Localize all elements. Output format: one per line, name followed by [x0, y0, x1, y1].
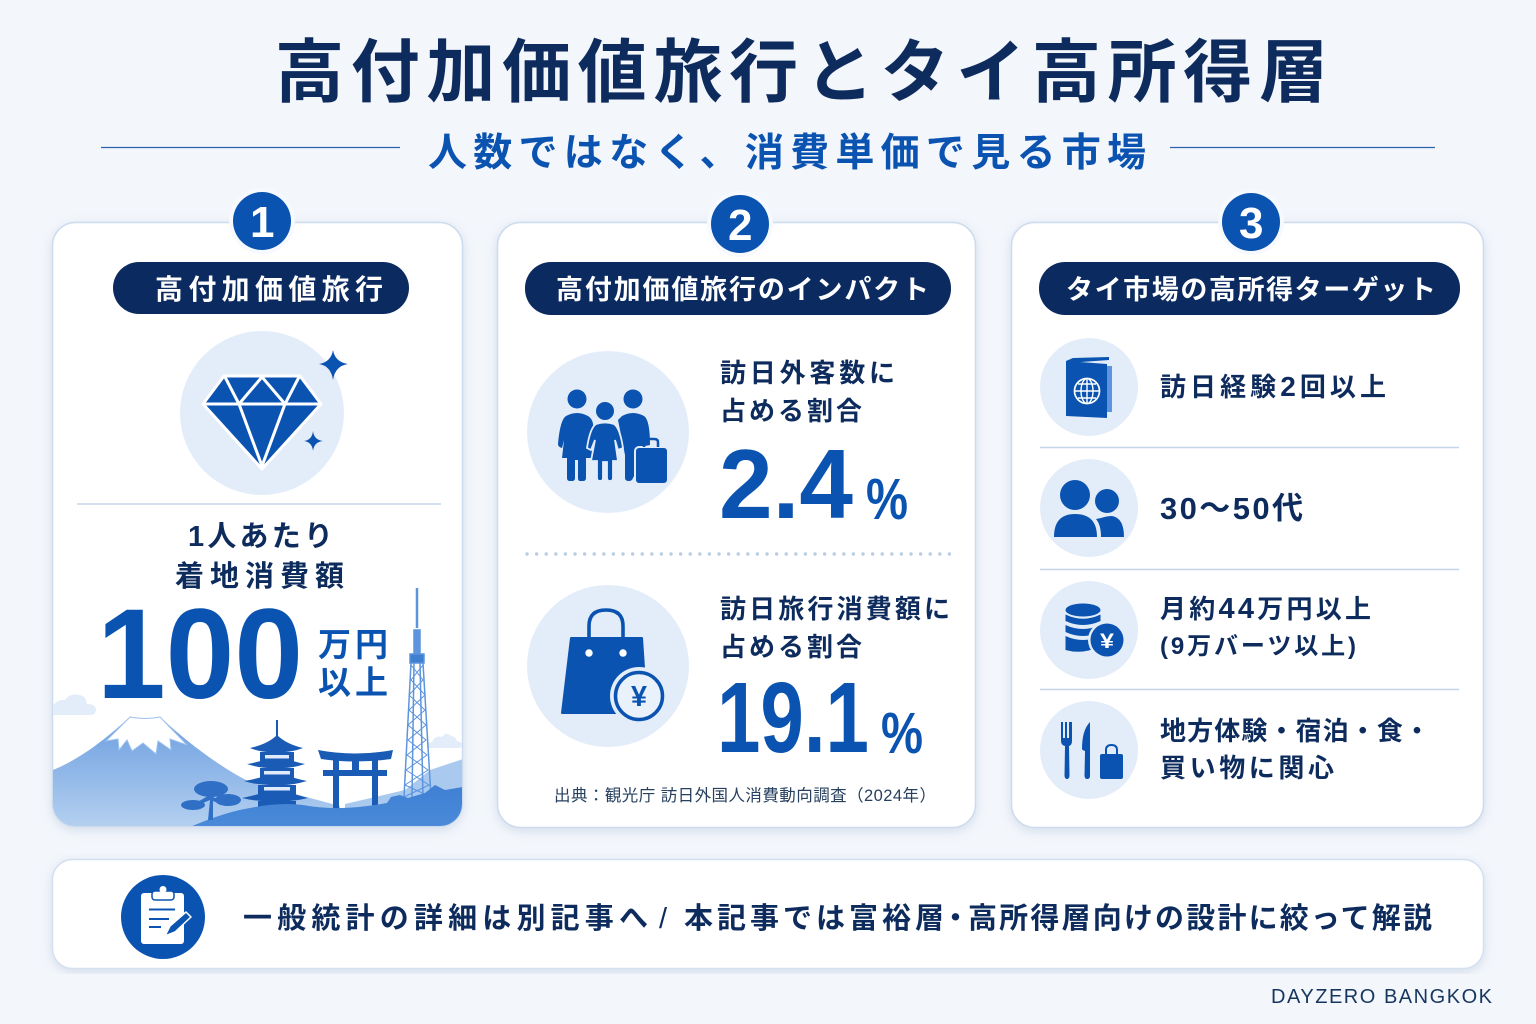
panel: 高付加価値旅行のインパクト [498, 191, 976, 828]
note text: / [659, 903, 668, 935]
torii [318, 750, 393, 809]
icon: clipboard and pen [121, 875, 205, 959]
number badge 1 [229, 188, 295, 254]
stat: 19.1%: 19.1 [717, 662, 869, 774]
heading pill: タイ市場の高所得ターゲット [1066, 275, 1436, 305]
number badge 2 [707, 191, 773, 257]
text: 訪日旅行消費額に占める割合: 訪日旅行消費額に [720, 594, 950, 624]
note text [243, 902, 1432, 935]
note text: ・ [941, 903, 970, 935]
source note: 出典：観光庁 訪日外国人消費動向調査（2024年） [554, 786, 936, 805]
icon: family with suitcase [527, 351, 689, 513]
stat: 100万円以上: 以上 [318, 664, 388, 701]
text: 訪日外客数に占める割合: 占める割合 [720, 396, 862, 426]
text: 月約44万円以上: 月約44万円以上 [1160, 593, 1371, 625]
text: 地方体験・宿泊・食・買い物に関心 [1160, 716, 1430, 783]
text: 訪日外客数に占める割合 [720, 358, 895, 426]
number badge 3: 3 [1239, 199, 1263, 248]
note text: 高所得層向けの設計に絞って解説 [968, 902, 1432, 935]
text: 30〜50代: 30～50代 [1160, 491, 1303, 526]
note text: 一般統計の詳細は別記事へ [243, 902, 648, 935]
heading pill [525, 262, 951, 315]
title: 高付加価値旅行とタイ高所得層 [275, 34, 1328, 111]
landscape illustration [53, 588, 463, 827]
text: 訪日旅行消費額に占める割合 [720, 594, 950, 662]
icon: coins and yen: ¥ [1100, 630, 1114, 653]
text: 1人あたり着地消費額 [175, 521, 344, 593]
stat: 100万円以上: 100 [97, 583, 303, 726]
footer note bar [52, 860, 1484, 968]
pagoda [242, 720, 308, 809]
panel: 高付加価値旅行 [52, 188, 463, 827]
icon: fork, knife, bag [1040, 701, 1138, 799]
stat: 100万円以上: 万円 [318, 626, 388, 663]
icon: shopping bag with yen coin [527, 585, 689, 747]
brand credit: DAYZERO BANGKOK [1271, 986, 1493, 1008]
text: 1人あたり着地消費額: 着地消費額 [175, 560, 344, 593]
number badge 2: 2 [728, 201, 752, 250]
heading pill: 高付加価値旅行のインパクト [556, 275, 929, 305]
text: 地方体験・宿泊・食・買い物に関心: 地方体験・宿泊・食・ [1160, 716, 1430, 746]
text: 地方体験・宿泊・食・買い物に関心: 買い物に関心 [1160, 753, 1334, 783]
foreground hill and trees [190, 785, 463, 827]
number badge 1: 1 [250, 198, 274, 247]
stat: 2.4%: 2.4 [719, 429, 853, 539]
heading pill: 高付加価値旅行 [155, 274, 383, 305]
heading pill [1039, 262, 1460, 315]
text: 訪日旅行消費額に占める割合: 占める割合 [720, 632, 862, 662]
text: 月約44万円以上 [1160, 593, 1371, 660]
icon: shopping bag with yen coin: ¥ [631, 681, 647, 713]
text: 訪日経験2回以上: 訪日経験2回以上 [1160, 371, 1386, 402]
text: 月約44万円以上: (9万バーツ以上) [1160, 633, 1356, 660]
stat: 2.4%: % [866, 467, 908, 532]
icon: passport [1040, 338, 1138, 436]
icon: two people [1040, 459, 1138, 557]
icon: diamond [180, 331, 348, 495]
note text: 本記事では富裕層 [684, 902, 944, 935]
heading pill [113, 262, 409, 314]
tokyo tower [404, 588, 431, 797]
subtitle: 人数ではなく、消費単価で見る市場 [428, 132, 1146, 175]
text: 1人あたり着地消費額: 1人あたり [188, 521, 333, 553]
text: 訪日外客数に占める割合: 訪日外客数に [720, 358, 895, 388]
panel: タイ市場の高所得ターゲット [1012, 189, 1484, 828]
icon: coins and yen [1040, 581, 1138, 679]
number badge 3 [1218, 189, 1284, 255]
stat: 19.1%: % [881, 701, 923, 766]
